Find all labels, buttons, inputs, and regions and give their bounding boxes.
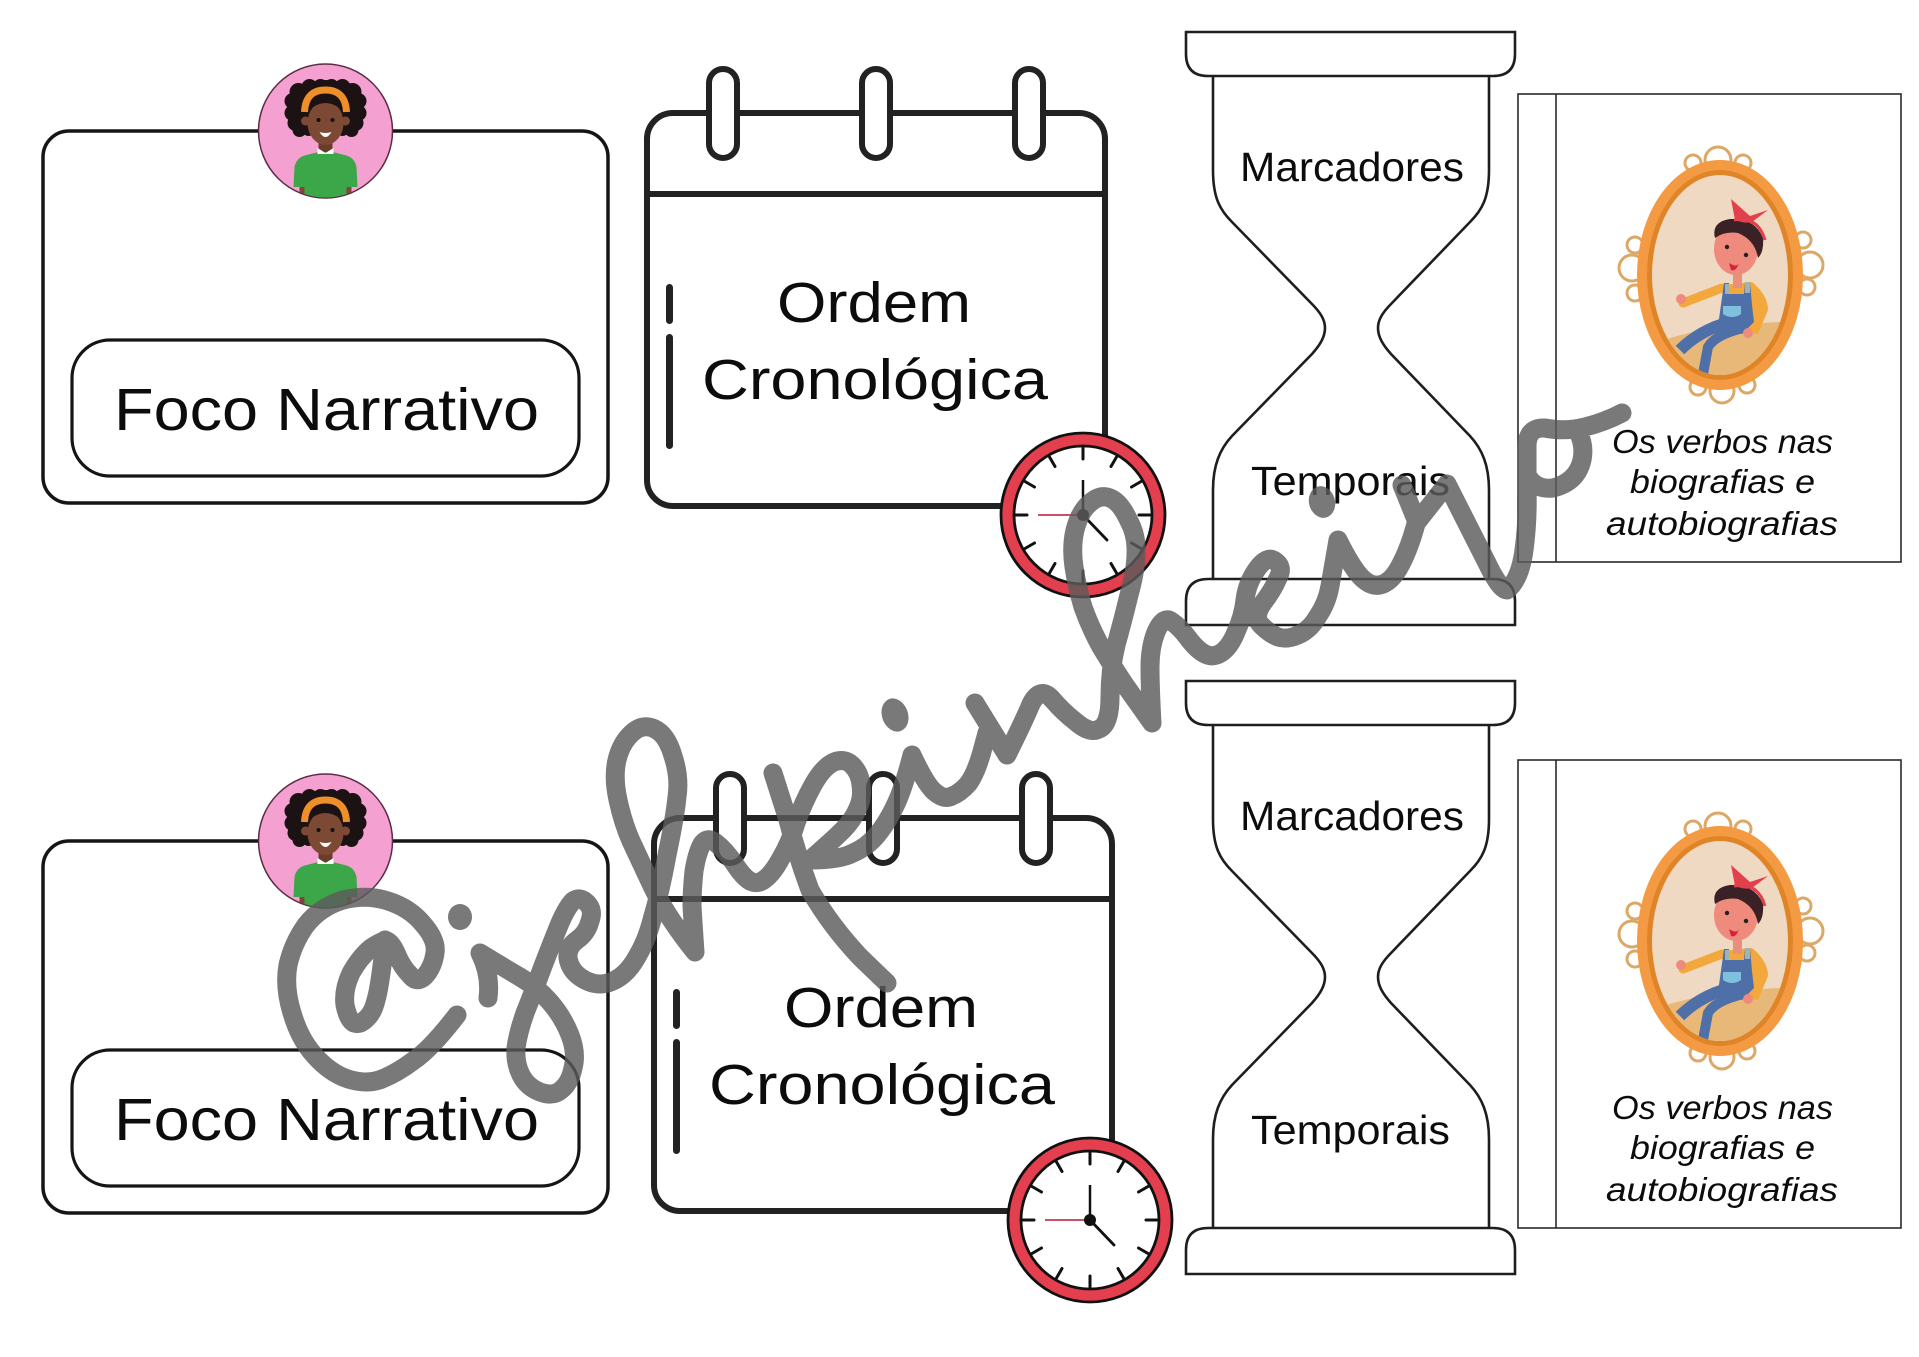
panel: marcadores temporais hourglass, top: Temporais: [1251, 458, 1450, 504]
text: os verbos nas biografias e autobiografias: [1606, 423, 1838, 542]
panel: book verbos, bottom: [1518, 760, 1901, 1228]
text: os verbos nas biografias e autobiografias, bottom: Os verbos nas: [1612, 1089, 1833, 1126]
heading: ordem cronologica, bottom: [709, 976, 1055, 1117]
icon: woman avatar: [258, 64, 392, 199]
label box: foco narrativo: Foco Narrativo: [114, 377, 539, 443]
heading: ordem cronologica, bottom: Ordem: [784, 976, 978, 1040]
panel: ordem cronologica calendar, bottom: [654, 774, 1172, 1302]
panel: marcadores temporais hourglass, top: Marcadores: [1240, 144, 1464, 190]
label box: foco narrativo, bottom: Foco Narrativo: [114, 1087, 539, 1153]
label box: foco narrativo, bottom: [72, 1050, 579, 1186]
icon: red clock: [1001, 433, 1165, 597]
label box: foco narrativo: [72, 340, 579, 476]
heading: ordem cronologica: Ordem: [777, 271, 971, 335]
icon: portrait in orange frame, bottom: [1619, 813, 1823, 1069]
text: os verbos nas biografias e autobiografias, bottom: autobiografias: [1606, 1171, 1838, 1208]
heading: ordem cronologica, bottom: Cronológica: [709, 1053, 1055, 1117]
text: os verbos nas biografias e autobiografias, bottom: [1606, 1089, 1838, 1208]
watermark: handwritten signature stroke: [287, 413, 1622, 1094]
text: os verbos nas biografias e autobiografias, bottom: biografias e: [1630, 1129, 1815, 1166]
heading: ordem cronologica: Cronológica: [702, 348, 1048, 412]
panel: marcadores temporais hourglass, bottom: [1186, 681, 1515, 1274]
panel: foco narrativo card, top: [43, 64, 608, 503]
panel: marcadores temporais hourglass, bottom: Temporais: [1251, 1107, 1450, 1153]
panel: marcadores temporais hourglass, bottom: Marcadores: [1240, 793, 1464, 839]
icon: portrait in orange frame: [1619, 147, 1823, 403]
heading: ordem cronologica: [702, 271, 1048, 412]
panel: book verbos, top: [1518, 94, 1901, 562]
icon: woman avatar, bottom: [258, 774, 392, 909]
icon: red clock, bottom: [1008, 1138, 1172, 1302]
panel: marcadores temporais hourglass, top: [1186, 32, 1515, 625]
text: os verbos nas biografias e autobiografias: autobiografias: [1606, 505, 1838, 542]
panel: ordem cronologica calendar, top: [647, 69, 1165, 597]
text: os verbos nas biografias e autobiografias: Os verbos nas: [1612, 423, 1833, 460]
panel: foco narrativo card, bottom: [43, 774, 608, 1213]
text: os verbos nas biografias e autobiografias: biografias e: [1630, 463, 1815, 500]
